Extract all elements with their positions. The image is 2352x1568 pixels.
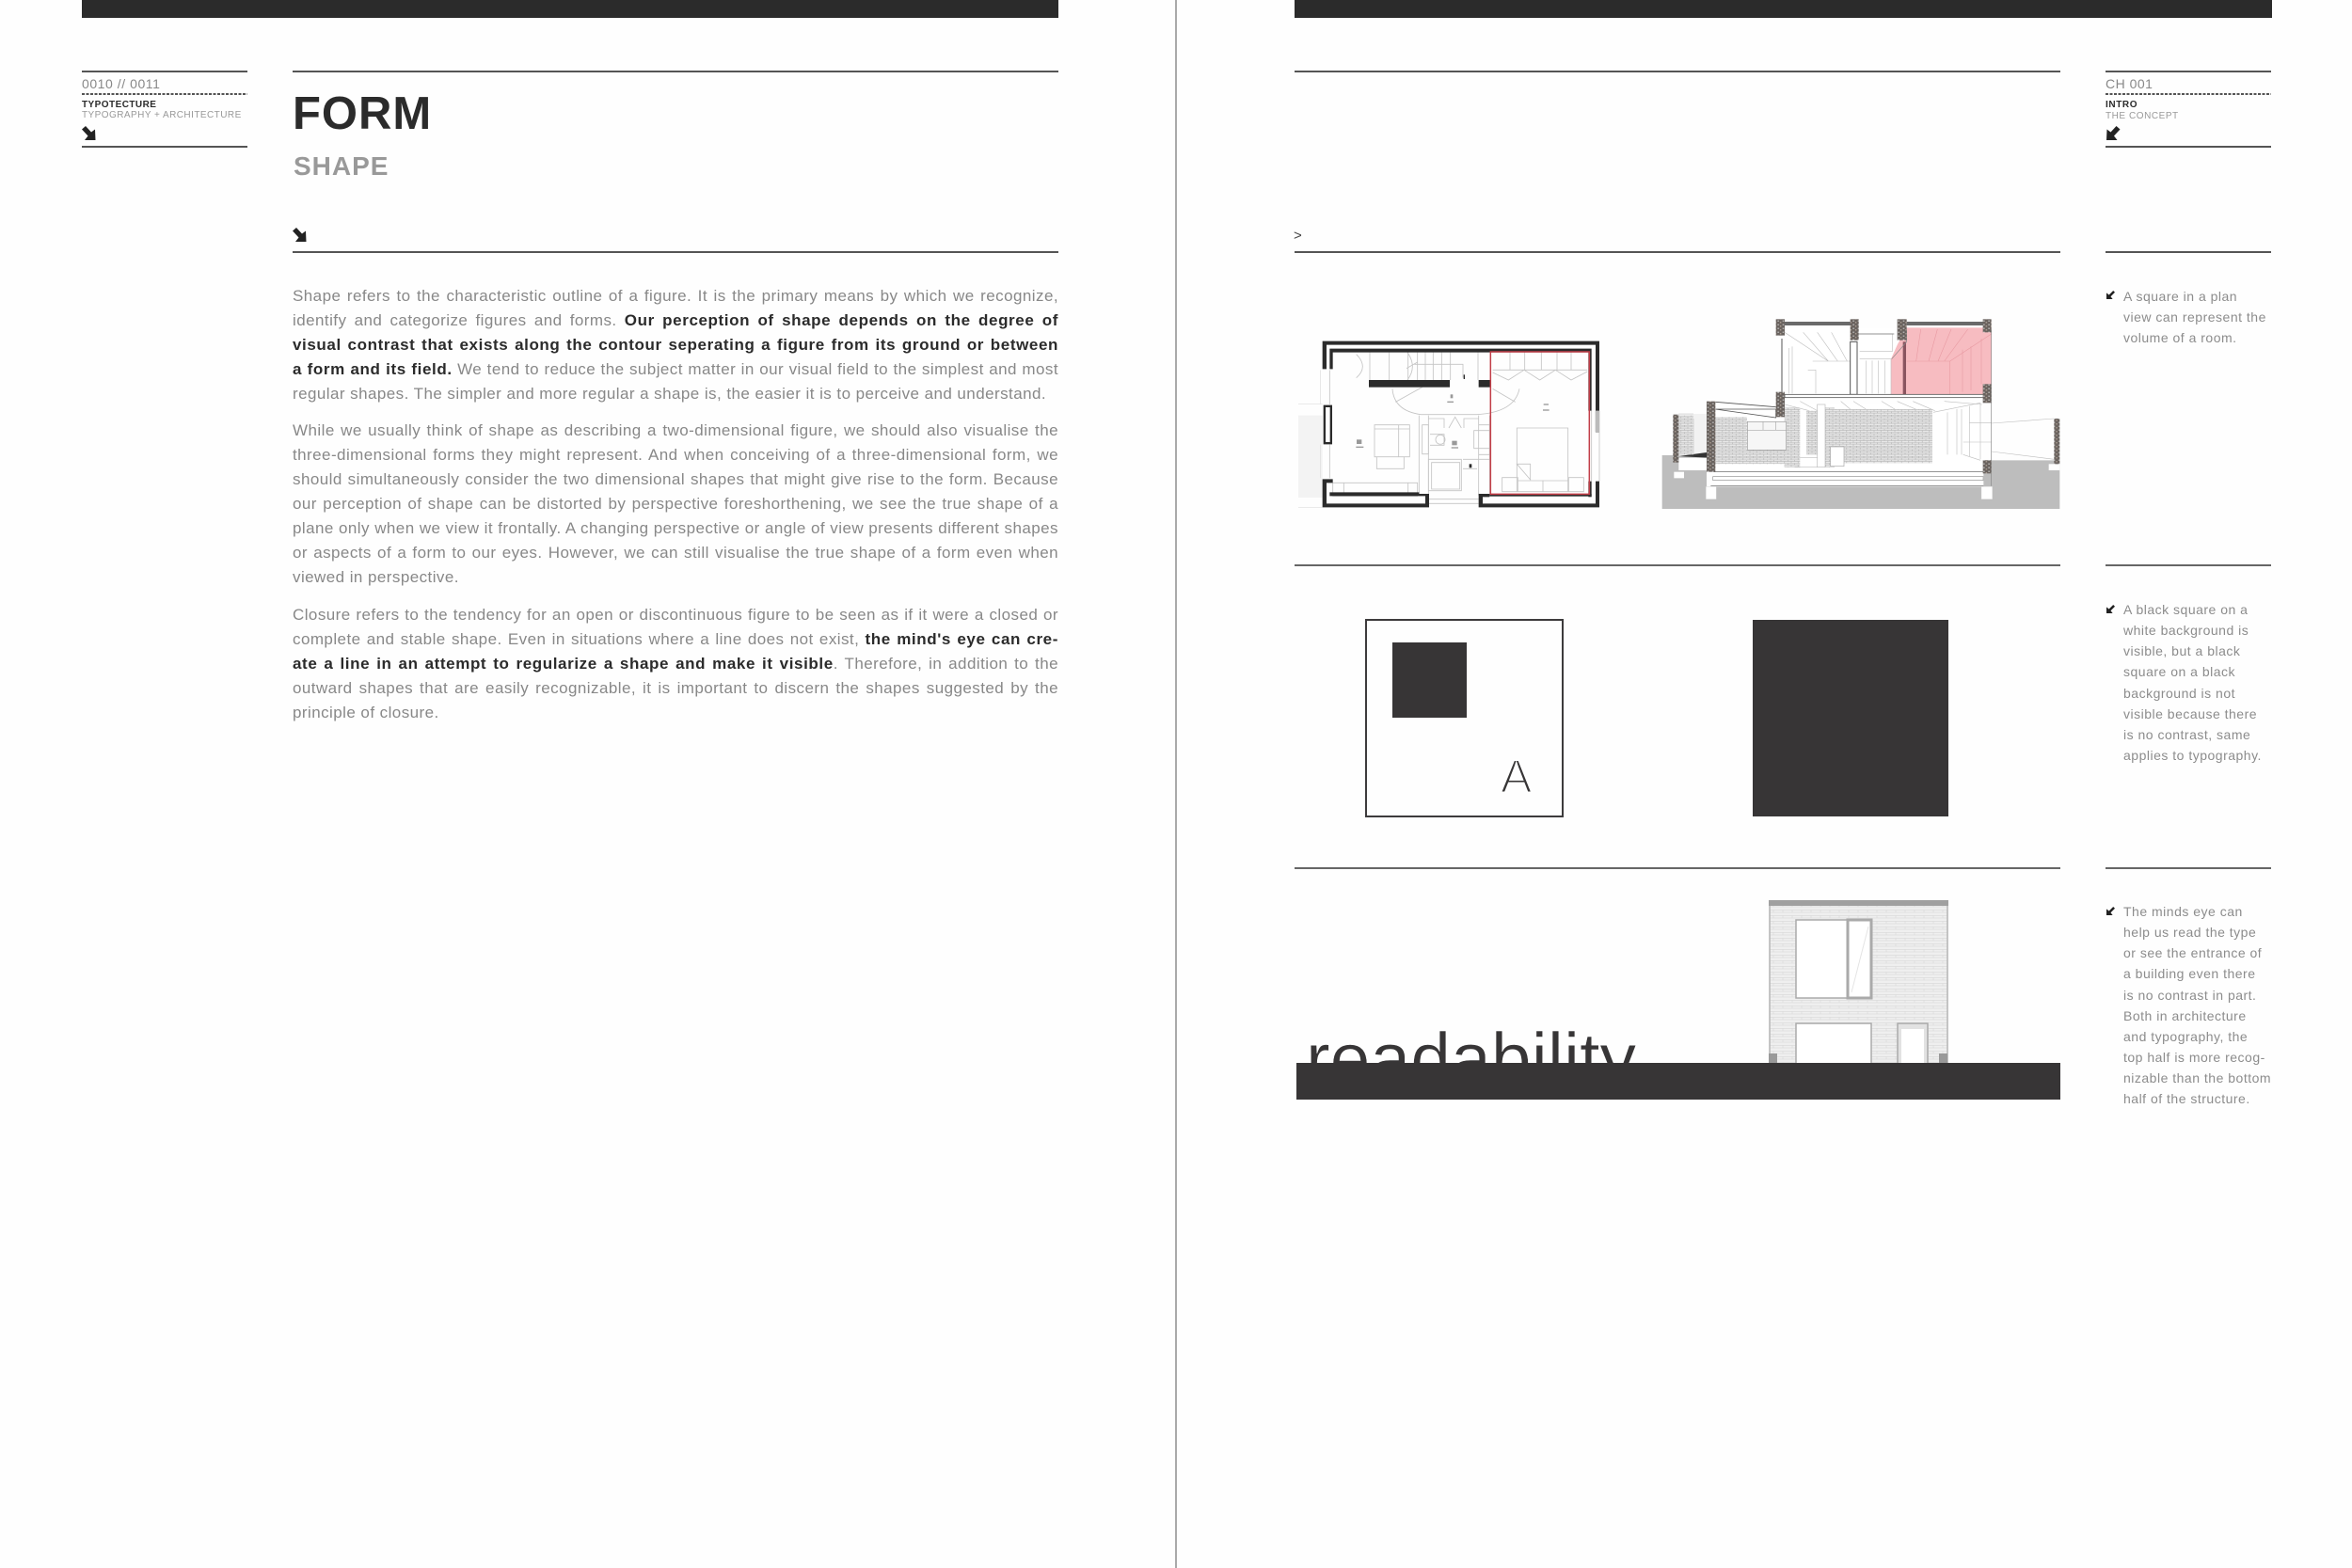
right margin header: INTRO [2106,100,2137,110]
brick columns [1707,402,1715,472]
icon: note arrow 1 [2106,291,2115,299]
paragraph 3: Closure refers to the tendency for an open or discontinuous figure to be seen as if it were a closed or [293,606,1058,624]
paragraph 1 [293,287,1058,403]
note 2: white background is [2123,623,2249,638]
top bar right page [1295,0,2272,18]
note 3: half of the structure. [2123,1091,2250,1106]
subtitle: SHAPE [294,151,389,181]
building elevation [1769,900,1948,1063]
black square [1392,642,1467,718]
title: FORM [293,88,432,139]
note 3: The minds eye can [2123,904,2243,919]
side rule 3 [2106,867,2271,869]
note 2: background is not [2123,686,2235,701]
note 1: view can represent the [2123,309,2266,325]
body rule [293,251,1058,253]
note 3: nizable than the bottom [2123,1070,2271,1085]
walls [1323,341,1599,411]
paragraph 3: principle of closure. [293,704,439,721]
note 3 [2123,904,2271,1106]
right page caret: > [1294,228,1302,244]
note 1: volume of a room. [2123,330,2237,345]
note 1 [2123,289,2266,345]
paragraph 1: Shape refers to the characteristic outline of a figure. It is the primary means by which we recognize, [293,287,1058,305]
note 3: and typography, the [2123,1029,2248,1044]
paragraph 1: visual contrast that exists along the contour seperating a figure from its ground or between [293,336,1058,354]
right page section rule 3 [1295,867,2060,869]
paragraph 2 [293,421,1058,586]
panel: white square with black square and A [1365,619,1564,817]
note 3: Both in architecture [2123,1008,2247,1023]
note 3: help us read the type [2123,925,2256,940]
slabs [1785,394,1985,398]
brick walls [1835,409,1932,463]
paragraph 2: should simultaneously consider the two dimensional shapes that might give rise to the form. Because [293,470,1058,488]
icon: note arrow 2 [2106,605,2115,613]
floor plan drawing [1298,341,1599,508]
title rule [293,71,1058,72]
paragraph 3: outward shapes that are easily recognizable, it is important to discern the shapes suggested by the [293,679,1058,697]
note 2: applies to typography. [2123,748,2262,763]
paragraph 2: our perception of shape can be distorted by perspective foreshorthening, we see the true shape of a [293,495,1058,513]
side rule 1 [2106,251,2271,253]
bottom dark band [1296,1063,2060,1100]
note 2: A black square on a [2123,602,2248,617]
note 2: square on a black [2123,664,2235,679]
right margin header: THE CONCEPT [2106,111,2179,121]
left margin header: TYPOGRAPHY + ARCHITECTURE [82,110,242,120]
left margin header [82,71,247,148]
panel: black square on black [1753,620,1948,816]
note 1: A square in a plan [2123,289,2237,304]
right page section rule 2 [1295,564,2060,566]
note 2 [2123,602,2262,763]
paragraph 2: or aspects of a form to our eyes. However, we can still visualise the true shape of a form even when [293,544,1058,562]
note 3: is no contrast in part. [2123,988,2256,1003]
paragraph 1: regular shapes. The simpler and more regular a shape is, the easier it is to perceive and understand. [293,385,1046,403]
left margin header: 0010 // 0011 [82,76,160,91]
readability word: readability [1306,1019,1636,1100]
arrow icon [293,228,307,242]
letter A: A [1501,751,1533,803]
paragraph 2: viewed in perspective. [293,568,459,586]
right page top rule [1295,71,2060,72]
left margin header: TYPOTECTURE [82,100,156,110]
paragraph 1: identify and categorize figures and forms. Our perception of shape depends on the degree of [293,311,1058,329]
side rule 2 [2106,564,2271,566]
upper left room lines [1678,332,2054,481]
note 2: is no contrast, same [2123,727,2250,742]
paragraph 1: a form and its field. We tend to reduce the subject matter in our visual field to the simplest and most [293,360,1058,378]
paragraph 2: three-dimensional forms they might represent. And when conceiving of a three-dimensional form, we [293,446,1058,464]
right margin header: CH 001 [2106,76,2153,91]
paragraph 2: While we usually think of shape as describing a two-dimensional figure, we should also visualise the [293,421,1058,439]
note 2: visible because there [2123,706,2257,721]
icon: note arrow 3 [2106,907,2115,915]
paragraph 2: plane only when we view it frontally. A changing perspective or angle of view presents different shapes [293,519,1058,537]
pink room [1891,327,1992,394]
top bar left page [82,0,1058,18]
paragraph 3: ate a line in an attempt to regularize a shape and make it visible. Therefore, in addition to the [293,655,1058,673]
note 2: visible, but a black [2123,643,2240,658]
right page section rule 1 [1295,251,2060,253]
paragraph 3: complete and stable shape. Even in situations where a line does not exist, the mind's eye can cre- [293,630,1058,648]
note 3: a building even there [2123,966,2256,981]
section drawing [1661,319,2060,509]
note 3: or see the entrance of [2123,945,2262,960]
note 3: top half is more recog- [2123,1050,2265,1065]
paragraph 3 [293,606,1058,721]
page divider [1175,0,1177,1568]
right margin header [2106,71,2271,148]
